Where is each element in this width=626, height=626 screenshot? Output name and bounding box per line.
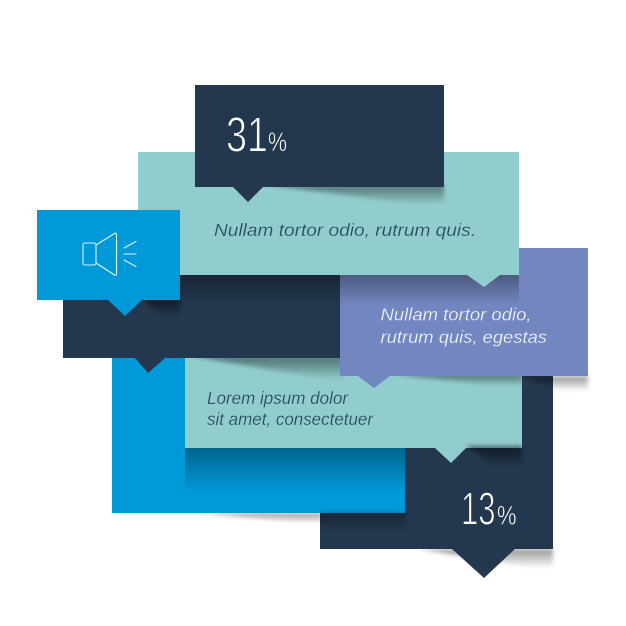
shadow on navy from teal lower <box>466 446 522 468</box>
shadow under purple callout <box>520 376 588 391</box>
number: 13: 13 <box>461 482 496 534</box>
text: lorem ipsum: Lorem ipsum dolor <box>207 388 349 408</box>
panel: navy middle band <box>63 273 340 373</box>
panel: blue icon callout <box>37 210 180 318</box>
shadow under large blue block <box>200 513 322 523</box>
shadow on teal from navy top callout <box>265 185 444 205</box>
unit: percent: % <box>497 500 516 530</box>
panel: teal lower text panel <box>185 356 522 468</box>
shadow on navy band from teal upper <box>180 275 340 296</box>
shadow on blue block from teal panel <box>185 448 405 487</box>
shadow on purple from teal upper <box>340 275 519 301</box>
text: rutrum quis egestas: rutrum quis, egestas <box>380 327 547 347</box>
icon: speaker <box>83 233 136 275</box>
panel: large blue block <box>112 358 405 530</box>
shadow on navy 13% from blue block <box>320 510 406 524</box>
panel: teal upper text panel <box>138 152 519 287</box>
shadow on teal lower from navy band <box>194 358 345 378</box>
panel: purple callout <box>340 248 588 391</box>
panel: navy 13% callout <box>320 376 553 578</box>
text: nullam tortor odio rutrum quis: Nullam tortor odio, rutrum quis. <box>214 220 476 240</box>
shadow under navy 13% callout <box>420 549 553 568</box>
shadow on teal lower from purple callout <box>398 376 522 386</box>
number: 31: 31 <box>226 108 268 162</box>
unit: percent: % <box>268 127 287 157</box>
text: nullam tortor odio: Nullam tortor odio, <box>380 304 532 324</box>
shadow on navy band from blue callout <box>143 298 182 314</box>
text: sit amet: sit amet, consectetuer <box>207 409 374 429</box>
panel: navy 31% callout <box>195 85 444 202</box>
